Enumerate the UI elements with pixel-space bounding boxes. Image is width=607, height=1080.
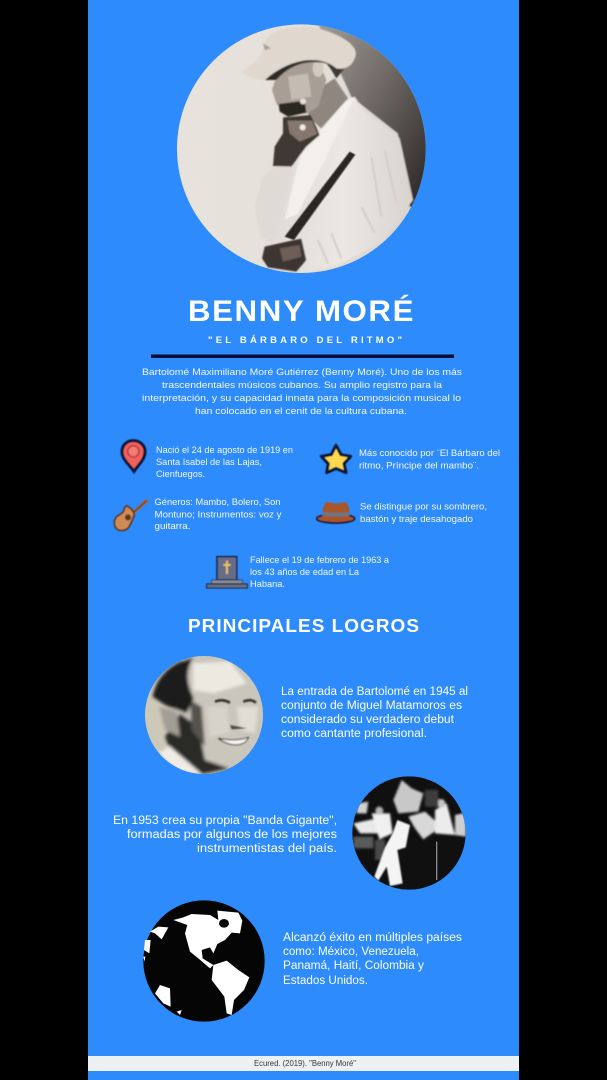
hair — [153, 657, 194, 713]
birth text: Santa Isabel de las Lajas, — [156, 457, 262, 468]
nickname text — [359, 448, 500, 472]
achievement text 1: considerado su verdadero debut — [281, 714, 455, 726]
portrait photo: Benny Moré with hat and cane — [175, 20, 428, 277]
hat text: bastón y traje desahogado — [360, 514, 473, 525]
title: BENNY MORÉ — [188, 294, 415, 328]
death text — [250, 555, 390, 590]
birth text: Cienfuegos. — [156, 469, 205, 480]
death text: los 43 años de edad en La — [250, 567, 360, 578]
footer band — [88, 1056, 519, 1071]
shirt front — [285, 97, 355, 220]
genres text: Géneros: Mambo, Bolero, Son — [154, 497, 280, 508]
blue poster panel — [88, 0, 519, 1080]
hat — [242, 27, 356, 80]
hat text — [360, 502, 487, 525]
lower hand — [262, 238, 306, 272]
achievement text 2: formadas por algunos de los mejores — [127, 829, 337, 841]
achievement text 1: La entrada de Bartolomé en 1945 al — [281, 686, 468, 698]
neck — [308, 78, 348, 128]
genres text: guitarra. — [154, 521, 190, 532]
death text: Habana. — [250, 579, 285, 590]
south america — [212, 961, 249, 1015]
subtitle: "EL BÁRBARO DEL RITMO" — [208, 335, 402, 346]
infographic canvas — [88, 0, 519, 1080]
achievement text 3: Estados Unidos. — [283, 975, 368, 987]
achievement text 3 — [283, 932, 462, 987]
achievement text 1: conjunto de Miguel Matamoros es — [281, 700, 462, 712]
mustache — [279, 101, 306, 117]
icon: hat — [317, 502, 355, 523]
sleeve ribbing — [318, 150, 396, 263]
left sleeve — [255, 160, 295, 243]
heading: principales logros: PRINCIPALES LOGROS — [188, 615, 420, 636]
photo: big band on stage — [350, 773, 470, 893]
hudson bay — [219, 919, 229, 928]
intro paragraph: interpretación, y su capacidad innata para la composición musical lo — [142, 393, 461, 404]
genres text: Montuno; Instrumentos: voz y — [154, 510, 282, 520]
face — [173, 657, 262, 772]
icon: location pin — [122, 441, 145, 471]
birth text — [156, 445, 293, 480]
icon: star — [321, 445, 351, 473]
citation: Ecured. (2019). "Benny Moré" — [254, 1059, 356, 1068]
hat text: Se distingue por su sombrero, — [360, 502, 487, 512]
icon: globe — [143, 900, 265, 1022]
hand at chin — [273, 115, 320, 167]
achievement text 2: En 1953 crea su propia "Banda Gigante", — [113, 815, 337, 827]
north america — [173, 911, 242, 968]
nickname text: ritmo, Príncipe del mambo¨. — [359, 460, 479, 472]
nickname text: Más conocido por ¨El Bárbaro del — [359, 448, 500, 459]
genres text — [154, 497, 282, 532]
face — [272, 60, 326, 113]
achievement text 3: como: México, Venezuela, — [283, 946, 419, 958]
icon: guitar — [114, 501, 147, 531]
ear — [313, 60, 323, 77]
achievement text 2 — [113, 815, 337, 855]
intro paragraph: Bartolomé Maximiliano Moré Gutiérrez (Benny Moré). Uno de los más — [142, 367, 462, 378]
photo: smiling portrait — [143, 653, 267, 777]
achievement text 1 — [281, 686, 468, 740]
hair — [264, 59, 331, 81]
achievement text 3: Alcanzó éxito en múltiples países — [283, 932, 462, 944]
achievement text 2: instrumentistas del país. — [197, 843, 337, 855]
collar — [158, 746, 202, 774]
backdrop shadow — [318, 23, 428, 207]
birth text: Nació el 24 de agosto de 1919 en — [156, 445, 293, 456]
intro paragraph — [142, 367, 462, 417]
title divider — [151, 354, 454, 358]
icon: tombstone — [207, 557, 247, 588]
jacket — [294, 96, 414, 266]
achievement text 3: Panamá, Haití, Colombia y — [283, 960, 424, 972]
cane — [285, 152, 355, 240]
asia edge — [143, 927, 168, 962]
achievement text 1: como cantante profesional. — [281, 728, 427, 740]
australia edge — [155, 985, 182, 1015]
ear — [159, 707, 180, 737]
intro paragraph: han colocado en el cenit de la cultura cubana. — [195, 406, 407, 417]
intro paragraph: trascendentales músicos cubanos. Su amplio registro para la — [162, 380, 443, 391]
death text: Fallece el 19 de febrero de 1963 a — [250, 555, 390, 566]
shadowed neck and jaw — [165, 713, 230, 774]
